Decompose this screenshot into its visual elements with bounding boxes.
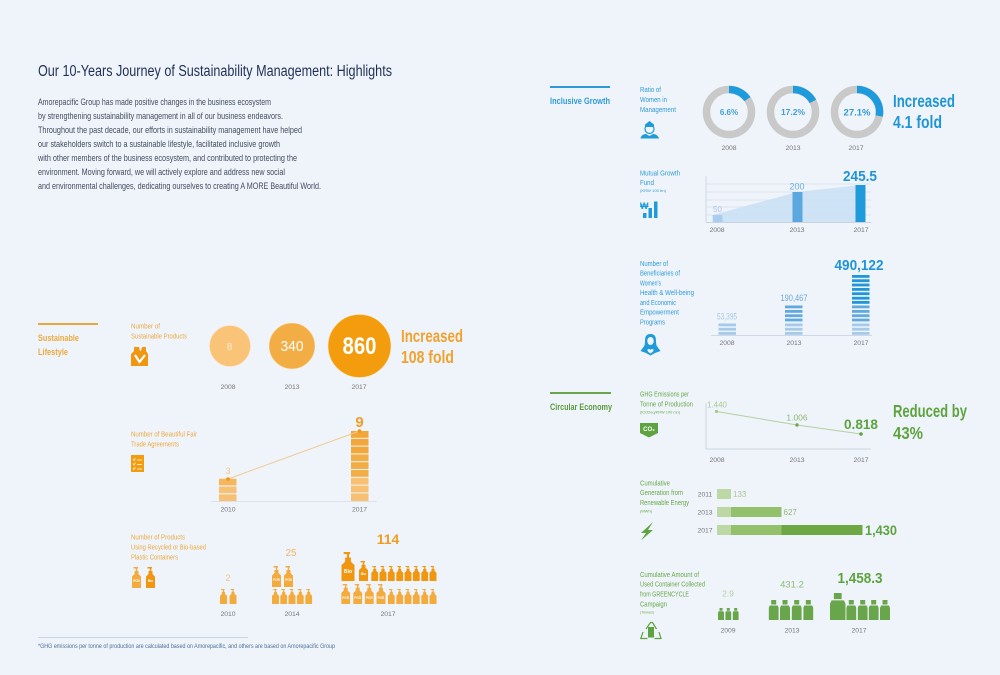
horizontal bar chart: 627	[784, 508, 797, 517]
icon: won bars	[640, 201, 658, 218]
section heading: Circular Economy	[550, 392, 613, 413]
title: Our 10-Years Journey of Sustainability Management: Highlights	[38, 63, 392, 80]
panel: renewable energy generation	[640, 478, 897, 540]
callout: increased 108 fold	[401, 326, 463, 367]
icon: checklist	[131, 455, 144, 472]
bottles 2017: PCR	[354, 596, 362, 600]
label: products using recycled containers: Number of Products	[131, 532, 185, 542]
label: mutual growth fund	[640, 168, 680, 193]
label: used containers: Cumulative Amount of	[640, 570, 700, 579]
striped bar 2017: 490,122	[834, 257, 884, 274]
label: beneficiaries: Beneficiaries of	[640, 268, 681, 278]
donut 2008: 2008	[721, 145, 737, 152]
label: beneficiaries	[640, 259, 694, 326]
horizontal bar chart	[697, 489, 897, 538]
line chart	[706, 400, 878, 464]
bottles 2014	[272, 548, 312, 618]
label: mutual growth fund: (KRW 100 bn)	[640, 189, 667, 193]
label: renewable energy: (MWh)	[640, 510, 653, 514]
label: used containers	[640, 570, 705, 614]
label: products using recycled containers	[131, 532, 206, 562]
callout: increased 108 fold: Increased	[401, 326, 463, 346]
icon: won bars: ₩	[640, 201, 649, 211]
section heading: Inclusive Growth: Inclusive Growth	[550, 96, 610, 107]
striped bar 2017: 2017	[853, 340, 869, 347]
area and bar chart: 2008	[709, 227, 725, 234]
callout: increased 4.1 fold: 4.1 fold	[893, 112, 942, 132]
panel: recycled or bio-based plastic containers	[131, 531, 436, 618]
circle 2008: 8	[227, 342, 233, 353]
containers 2017	[830, 570, 890, 634]
bottles 2017: Bio	[361, 572, 366, 576]
intro text block	[37, 97, 321, 191]
donut 2017: 27.1%	[844, 108, 871, 118]
horizontal bar chart: 2017	[697, 528, 713, 534]
bottles 2017: PCR	[378, 596, 385, 600]
label: renewable energy	[640, 478, 689, 514]
label: number of sustainable products: Sustainable Products	[131, 332, 187, 340]
donut 2013: 2013	[785, 145, 801, 152]
striped bar 2008: 2008	[719, 340, 735, 347]
intro text block: Throughout the past decade, our efforts in sustainability management have helped	[38, 125, 302, 135]
line chart: 1.440	[707, 400, 728, 410]
icon: woman	[640, 121, 659, 138]
bottles 2014: 25	[285, 548, 297, 559]
bottles 2017: PCR	[342, 596, 350, 600]
label: fair trade agreements: Trade Agreements	[131, 440, 179, 448]
callout: increased 108 fold: 108 fold	[401, 347, 454, 367]
donut 2013: 17.2%	[781, 107, 805, 117]
intro text block: Amorepacific Group has made positive changes in the business ecosystem	[38, 97, 271, 107]
striped bar 2013	[780, 293, 808, 347]
containers 2009: 2.9	[722, 588, 734, 598]
icon legend: PCR and Bio bottles: PCR	[133, 579, 141, 583]
striped bar 2008: 53,395	[717, 312, 737, 322]
circle 2013: 2013	[284, 384, 300, 391]
intro text block: and environmental challenges, dedicating ourselves to creating A MORE Beautiful World.	[38, 181, 321, 191]
section heading: Circular Economy: Circular Economy	[550, 402, 613, 413]
label: renewable energy: Renewable Energy	[640, 498, 689, 507]
panel: used containers collected	[640, 570, 890, 638]
containers 2017: 2017	[851, 628, 867, 634]
donut 2008: 6.6%	[720, 108, 738, 117]
label: number of sustainable products: Number of	[131, 322, 161, 330]
label: GHG emissions: GHG Emissions per	[640, 390, 689, 398]
horizontal bar chart: 2013	[697, 510, 713, 516]
line chart: 2013	[789, 457, 805, 464]
bar 2010	[219, 479, 236, 501]
section heading: Sustainable Lifestyle: Sustainable	[38, 333, 79, 344]
containers 2017: 1,458.3	[838, 570, 882, 587]
label: GHG emissions: Tonne of Production	[640, 400, 693, 408]
horizontal bar chart: 1,430	[865, 522, 897, 538]
label: ratio of women	[640, 85, 677, 114]
section heading: Sustainable Lifestyle: Lifestyle	[38, 347, 68, 358]
icon: lightning bolt	[641, 522, 653, 540]
label: fair trade agreements	[131, 430, 197, 448]
bottles 2014: 2014	[284, 611, 300, 618]
label: beneficiaries: Health & Well-being	[640, 288, 694, 297]
label: mutual growth fund: Mutual Growth	[640, 168, 680, 178]
label: fair trade agreements: Number of Beautiful Fair	[131, 430, 197, 438]
callout: reduced by 43%	[893, 401, 967, 443]
bottles 2014: PCR	[285, 578, 293, 582]
label: beneficiaries: Programs	[640, 318, 665, 326]
icon legend: PCR and Bio bottles: Bio	[148, 579, 153, 583]
icon: recycling container	[641, 622, 661, 638]
value labels and years: 3	[225, 466, 231, 476]
donut 2008	[706, 90, 752, 152]
label: beneficiaries: Women's	[640, 278, 661, 288]
containers 2013: 2013	[784, 628, 800, 634]
area and bar chart: 2017	[853, 227, 869, 234]
line chart: 2017	[853, 457, 869, 464]
label: used containers: Campaign	[640, 600, 667, 608]
panel: ratio of women in management	[640, 85, 955, 152]
area and bar chart: 50	[713, 205, 722, 214]
intro text block: environment. Moving forward, we will actively explore and address new social	[38, 167, 285, 177]
label: used containers: from GREENCYCLE	[640, 590, 689, 598]
striped bar 2008	[717, 312, 737, 347]
icon legend: PCR and Bio bottles	[132, 567, 155, 588]
callout: reduced by 43%: 43%	[893, 423, 923, 443]
donut 2017	[834, 89, 880, 152]
area and bar chart: 245.5	[843, 169, 877, 185]
donut 2013	[770, 89, 816, 152]
panel: number of sustainable products	[131, 314, 463, 391]
label: number of sustainable products	[131, 322, 187, 340]
label: beneficiaries: and Economic	[640, 298, 676, 307]
bottles 2010: 2	[225, 573, 231, 583]
label: ratio of women: Ratio of	[640, 85, 662, 94]
intro text block: our stakeholders switch to a sustainable lifestyle, facilitated inclusive growth	[38, 139, 280, 149]
horizontal bar chart: 133	[733, 490, 747, 499]
bottles 2017: PCR	[366, 596, 373, 600]
label: used containers: Used Container Collected	[640, 580, 705, 588]
circle 2017: 2017	[351, 384, 367, 391]
bottles 2017	[341, 531, 436, 618]
callout: increased 4.1 fold: Increased	[893, 91, 955, 111]
trend line	[226, 429, 361, 481]
bottles 2017: 114	[377, 531, 400, 547]
label: renewable energy: Generation from	[640, 488, 683, 497]
icon: product with check	[131, 347, 148, 366]
circle 2008: 2008	[220, 384, 236, 391]
label: mutual growth fund: Fund	[640, 178, 654, 187]
label: ratio of women: Women in	[640, 95, 667, 104]
label: beneficiaries: Number of	[640, 259, 669, 268]
label: beneficiaries: Empowerment	[640, 308, 680, 316]
striped bar 2013: 2013	[786, 340, 802, 347]
intro text block: with other members of the business ecosystem, and contributed to protecting the	[37, 153, 297, 163]
containers 2013	[769, 580, 813, 634]
panel: beautiful fair trade agreements	[131, 414, 377, 514]
intro text block: by strengthening sustainability management in all of our business endeavors.	[38, 111, 283, 121]
bottles 2014: PCR	[273, 578, 281, 582]
panel: mutual growth fund	[640, 168, 877, 234]
section heading: Sustainable Lifestyle	[38, 323, 98, 358]
value labels and years: 2017	[352, 506, 367, 514]
icon: CO2 down arrow	[640, 423, 658, 438]
circle 2013: 340	[280, 338, 304, 355]
label: GHG emissions: (tCO2eq/KRW 100 mn)	[640, 410, 681, 414]
bottles 2010	[220, 573, 236, 618]
containers 2009	[718, 588, 739, 634]
area and bar chart	[706, 169, 877, 234]
horizontal bar chart: 2011	[698, 492, 713, 498]
containers 2009: 2009	[720, 628, 736, 634]
bottles 2017: Bio	[344, 569, 352, 575]
area and bar chart: 200	[789, 182, 805, 192]
icon: CO2 down arrow: CO₂	[643, 427, 655, 433]
donut 2017: 2017	[848, 145, 864, 152]
line chart: 1.006	[786, 412, 808, 422]
label: used containers: (Tonnes)	[640, 610, 655, 614]
label: GHG emissions	[640, 390, 693, 414]
circle 2017	[328, 314, 391, 391]
value labels and years: 9	[355, 414, 364, 431]
line chart: 0.818	[844, 416, 878, 432]
label: products using recycled containers: Plastic Containers	[131, 552, 178, 562]
striped bar 2013: 190,467	[780, 293, 808, 303]
bottles 2017: 2017	[380, 611, 396, 618]
label: ratio of women: Management	[640, 105, 677, 114]
label: renewable energy: Cumulative	[640, 478, 670, 488]
containers 2013: 431.2	[780, 580, 804, 590]
label: products using recycled containers: Using Recycled or Bio-based	[131, 542, 206, 552]
section heading: Inclusive Growth	[550, 86, 610, 107]
value labels and years	[220, 414, 367, 514]
callout: reduced by 43%: Reduced by	[893, 401, 967, 421]
bar 2017	[351, 431, 368, 501]
bottles 2010: 2010	[220, 611, 236, 618]
icon: woman with heart	[640, 334, 660, 356]
striped bar 2017	[834, 257, 884, 347]
line chart: 2008	[709, 457, 725, 464]
panel: beneficiaries of women's programs	[640, 257, 884, 356]
circle 2017: 860	[342, 333, 376, 360]
circle 2008	[210, 326, 250, 391]
circle 2013	[269, 323, 315, 391]
value labels and years: 2010	[220, 506, 236, 514]
area and bar chart: 2013	[789, 227, 805, 234]
footnote: *GHG emissions per tonne of production are calculated based on Amorepacific, and others are based on Amorepacific Group	[38, 643, 335, 650]
panel: GHG emissions	[640, 390, 967, 464]
callout: increased 4.1 fold	[893, 91, 955, 132]
